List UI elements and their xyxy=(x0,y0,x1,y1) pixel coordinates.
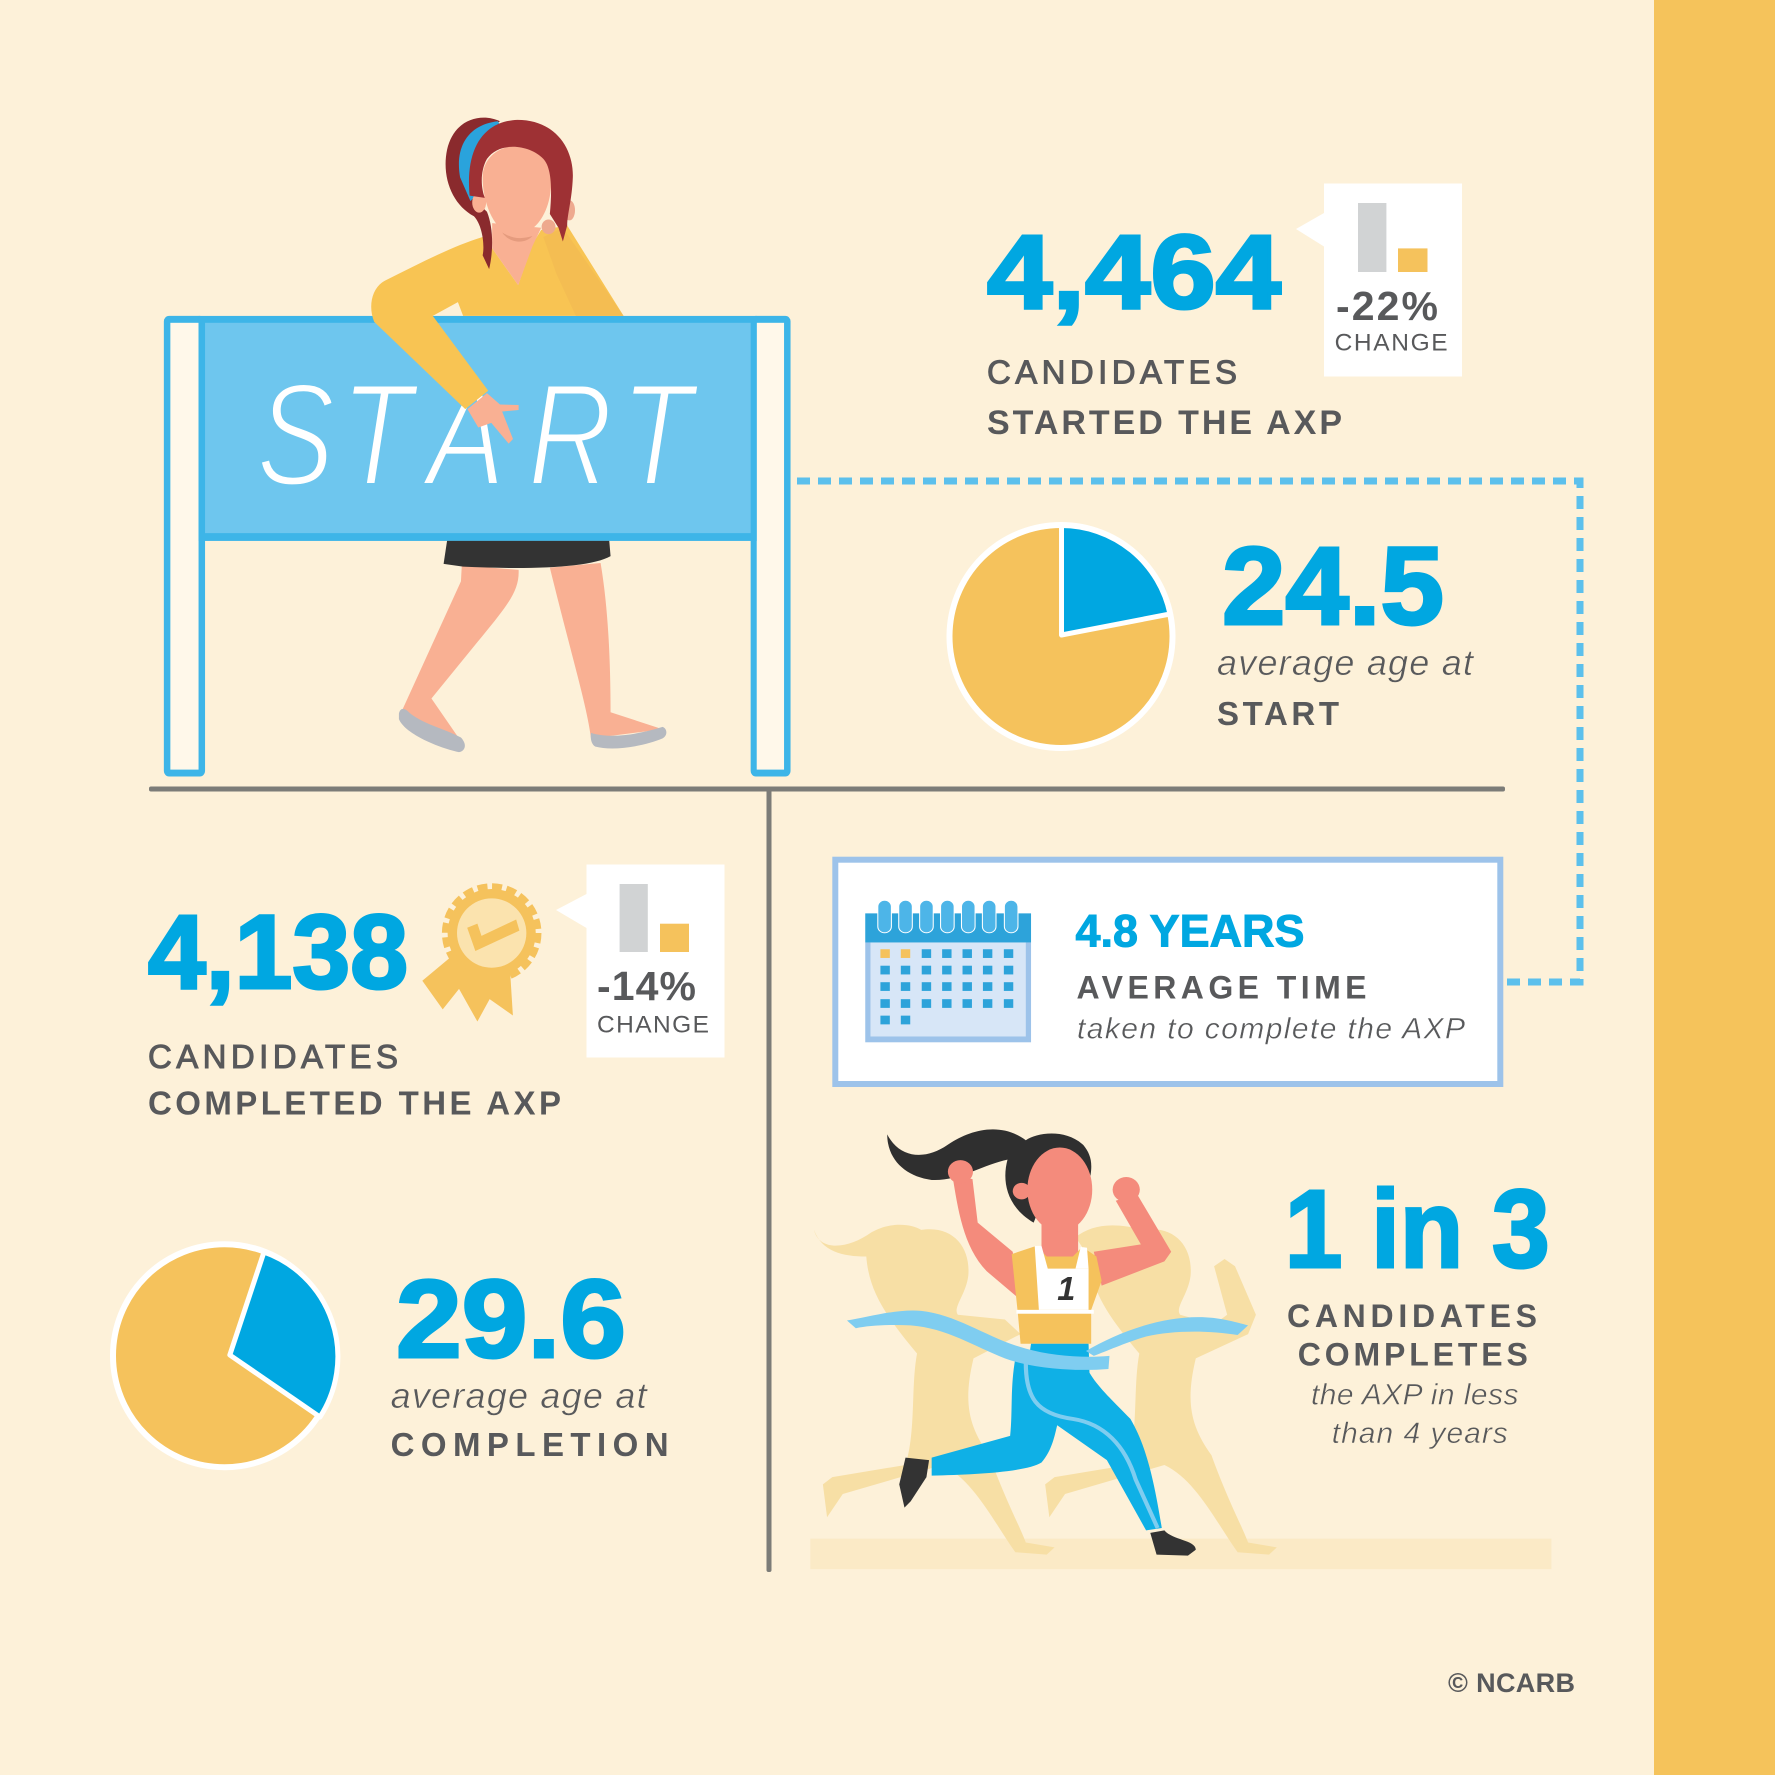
dotted connector line xyxy=(797,481,1580,982)
pie chart: average age at completion xyxy=(113,1244,338,1467)
callout: -22% change xyxy=(1296,184,1462,376)
vertical divider line xyxy=(766,789,772,1572)
label candidates completed the AXP: COMPLETED THE AXP xyxy=(148,1084,561,1121)
stat: 1 in 3 candidates completes: COMPLETES xyxy=(1298,1337,1528,1373)
panel: average time xyxy=(835,860,1500,1084)
stat: 29.6 average age at completion: COMPLETION xyxy=(391,1426,669,1463)
text: 4.8 years average time: AVERAGE TIME xyxy=(1076,970,1366,1006)
stat: 1 in 3 candidates completes: than 4 years xyxy=(1332,1417,1508,1450)
label candidates completed the AXP: CANDIDATES xyxy=(148,1038,398,1075)
pie chart: average age at start xyxy=(950,525,1172,748)
woman figure xyxy=(371,118,666,752)
text: 4.8 years average time xyxy=(1076,905,1465,1045)
callout: -22% change: CHANGE xyxy=(1335,330,1448,357)
ghost runners xyxy=(814,1225,1277,1555)
icon: calendar xyxy=(865,900,1031,1042)
callout: -22% change: -22% xyxy=(1336,283,1438,329)
right colour band xyxy=(1654,0,1775,1775)
banner word START: START xyxy=(257,354,699,517)
callout: -14% change: -14% xyxy=(597,963,696,1009)
stat: candidates completed xyxy=(148,864,724,1121)
horizontal ground line xyxy=(149,786,1505,792)
stat: 24.5 average age at start: average age at xyxy=(1217,642,1475,683)
stat: 24.5 average age at start: START xyxy=(1217,695,1339,732)
bib number: 1 xyxy=(1057,1270,1075,1307)
number 4,138: 4,138 xyxy=(148,894,408,1011)
runner figure xyxy=(847,1129,1248,1556)
runner illustration xyxy=(810,1129,1551,1569)
stat: 1 in 3 candidates completes: 1 in 3 xyxy=(1285,1168,1550,1291)
callout: -14% change: CHANGE xyxy=(597,1012,709,1039)
stat: 29.6 average age at completion: 29.6 xyxy=(396,1258,626,1381)
number 4,464: 4,464 xyxy=(987,214,1281,331)
sign posts and banner xyxy=(164,316,791,777)
stat: 24.5 average age at start: 24.5 xyxy=(1222,525,1444,648)
credit: NCARB: © NCARB xyxy=(1448,1668,1575,1698)
stat: 1 in 3 candidates completes xyxy=(1285,1168,1550,1450)
stat: 1 in 3 candidates completes: the AXP in less xyxy=(1311,1378,1518,1411)
callout: -14% change xyxy=(556,864,724,1058)
stat: 24.5 average age at start xyxy=(1217,525,1475,732)
stat: 1 in 3 candidates completes: CANDIDATES xyxy=(1287,1298,1537,1334)
label candidates started the AXP xyxy=(987,354,1342,442)
label candidates started the AXP: STARTED THE AXP xyxy=(987,404,1342,442)
text: 4.8 years average time: 4.8 YEARS xyxy=(1076,905,1304,956)
stat: 29.6 average age at completion: average age at xyxy=(391,1375,649,1416)
icon: award ribbon badge xyxy=(422,887,537,1022)
ground strip xyxy=(810,1539,1551,1569)
stat: 29.6 average age at completion xyxy=(391,1258,669,1463)
label candidates completed the AXP xyxy=(148,1038,561,1121)
label candidates started the AXP: CANDIDATES xyxy=(987,354,1237,390)
start sign with woman xyxy=(164,118,791,777)
text: 4.8 years average time: taken to complete the AXP xyxy=(1077,1012,1465,1045)
stat: candidates started xyxy=(987,184,1462,442)
